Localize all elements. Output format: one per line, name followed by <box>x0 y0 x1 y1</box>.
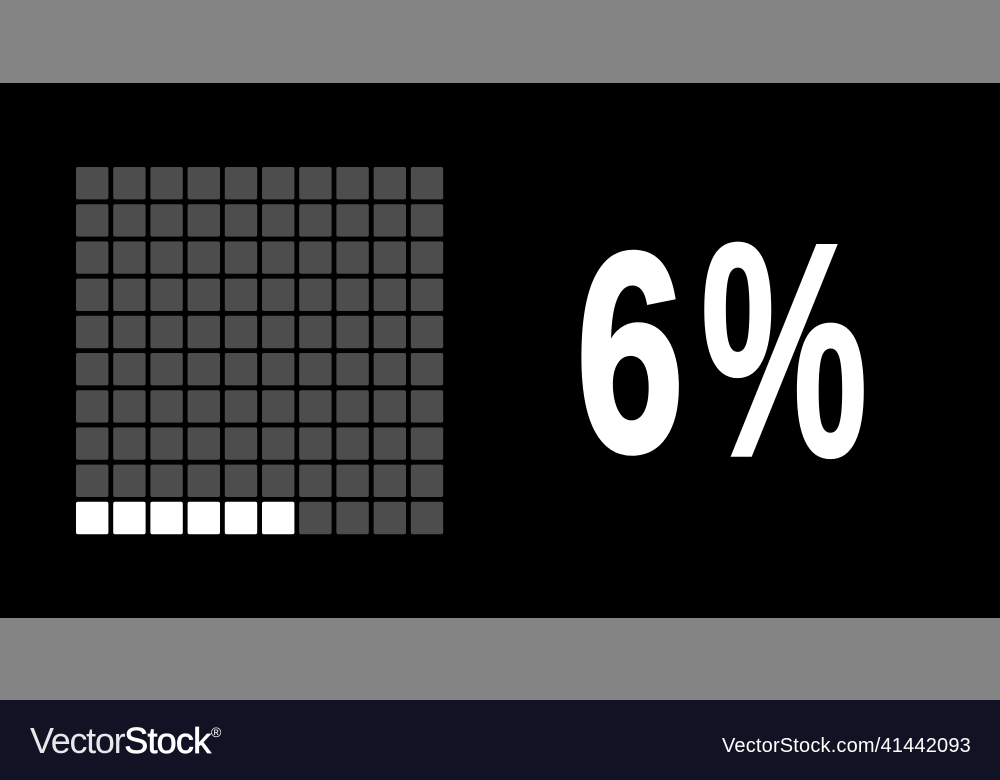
waffle chart: 6 of 100 squares filled <box>76 167 444 534</box>
footer logo: VectorStock <box>30 720 210 761</box>
bottom grey band <box>0 618 1000 700</box>
footer bar <box>0 700 1000 780</box>
top grey band <box>0 0 1000 83</box>
black main panel <box>0 83 1000 618</box>
footer image id: VectorStock.com/41442093 <box>722 735 971 757</box>
footer logo: ® <box>211 724 221 740</box>
percentage value <box>576 220 868 480</box>
